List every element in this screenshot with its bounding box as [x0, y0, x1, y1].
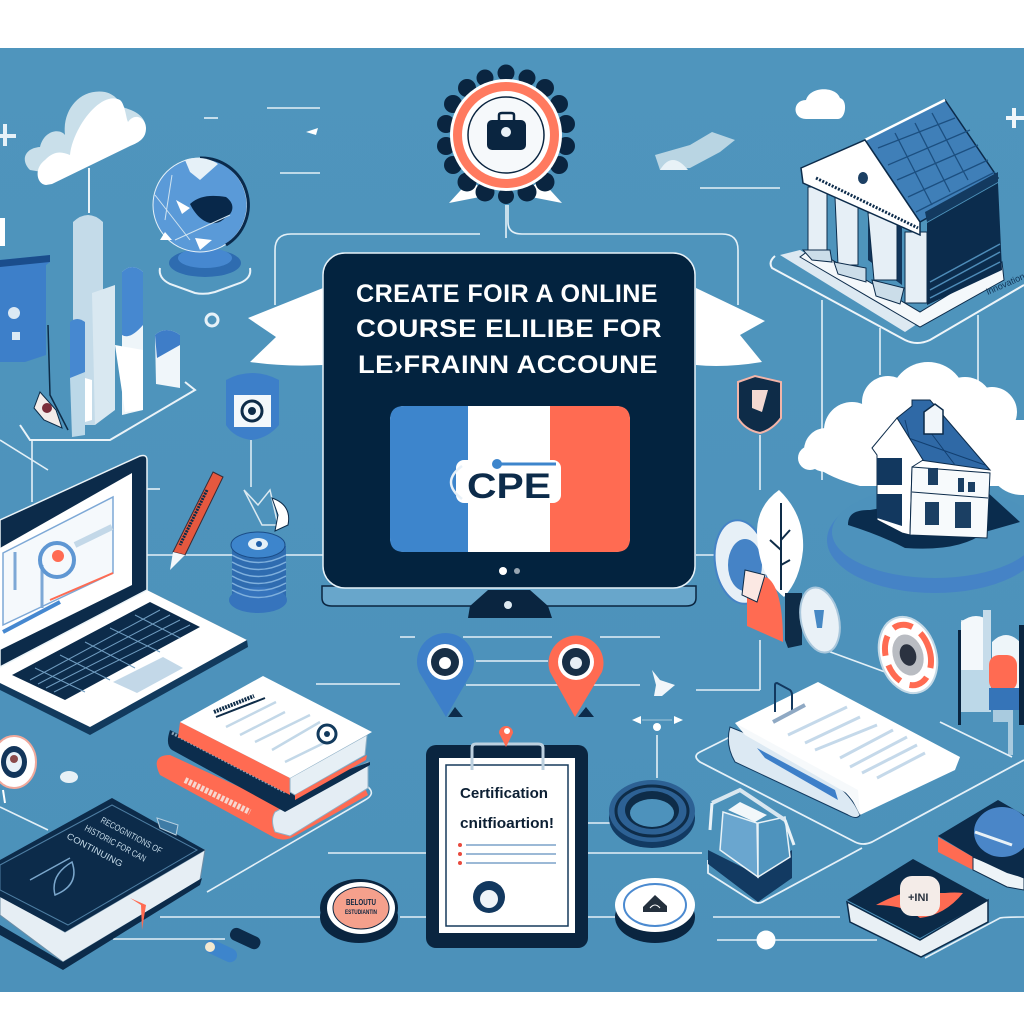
book with seal bottom right — [847, 859, 988, 957]
small cross icon top left — [0, 124, 16, 146]
laptop — [0, 456, 248, 735]
house on cloud platform — [798, 362, 1024, 593]
arrow marker — [632, 716, 683, 731]
ribbon: left — [248, 288, 323, 366]
small emblem under banner — [34, 325, 68, 430]
globe on stand — [153, 158, 250, 294]
hat book far right — [938, 800, 1024, 890]
icon cluster right — [709, 490, 845, 656]
badge: bottom left: BELOUTU — [346, 898, 376, 907]
small cross icon top right — [1006, 108, 1024, 128]
seal badge top — [437, 64, 575, 204]
ribbon: right — [696, 288, 765, 366]
monitor heading: CREATE FOIR A ONLINE — [356, 280, 658, 308]
French flag card: CPE — [467, 467, 551, 506]
bottle cluster right — [958, 610, 1024, 755]
badge: bottom left — [320, 879, 398, 943]
location pin: red — [548, 636, 604, 717]
book with seal bottom right: +INI — [908, 892, 928, 904]
pen — [170, 472, 223, 570]
dark book bottom left — [0, 798, 205, 970]
poker-chip badge — [869, 609, 947, 701]
stamp device — [708, 790, 862, 903]
bank building — [771, 100, 1024, 343]
certification clipboard — [426, 726, 588, 948]
bar chart columns — [20, 215, 195, 440]
badge: bottom left: ESTUDIANTIN — [345, 910, 377, 916]
cloud top right — [796, 89, 845, 119]
decorative ring — [206, 314, 218, 326]
large document on platform — [696, 682, 1024, 844]
cable ring — [609, 780, 695, 848]
location pin: blue — [417, 633, 474, 717]
stacked books — [157, 676, 372, 840]
certificate text: Certification — [460, 785, 548, 802]
small butterfly icon — [652, 670, 675, 696]
keyboard — [12, 602, 200, 700]
main monitor — [322, 253, 696, 618]
French flag card — [390, 406, 630, 552]
monitor heading: COURSE ELILIBE FOR — [356, 315, 662, 343]
shield badge left — [226, 373, 279, 440]
target icon left — [0, 736, 36, 803]
cloud with pole, top left — [25, 92, 146, 213]
dark book bottom left: HISTORIC FOR CAN — [83, 823, 148, 864]
coin stack — [229, 440, 289, 613]
small plane icon left of seal — [306, 128, 318, 135]
certificate text: cnitfioartion! — [460, 815, 554, 832]
small note icon — [60, 771, 78, 783]
plane and small cloud, top — [655, 132, 735, 170]
dark book bottom left: RECOGNITIONS OF — [99, 815, 164, 856]
dark book bottom left: CONTINUING — [65, 831, 124, 869]
timeline dot — [756, 930, 776, 950]
small red shield — [738, 376, 781, 433]
monitor heading: LE›FRAINN ACCOUNE — [358, 351, 658, 379]
pills — [203, 926, 262, 965]
badge: bottom centre right — [615, 878, 695, 943]
left banner panel — [0, 218, 50, 362]
footer band — [0, 992, 1024, 1024]
